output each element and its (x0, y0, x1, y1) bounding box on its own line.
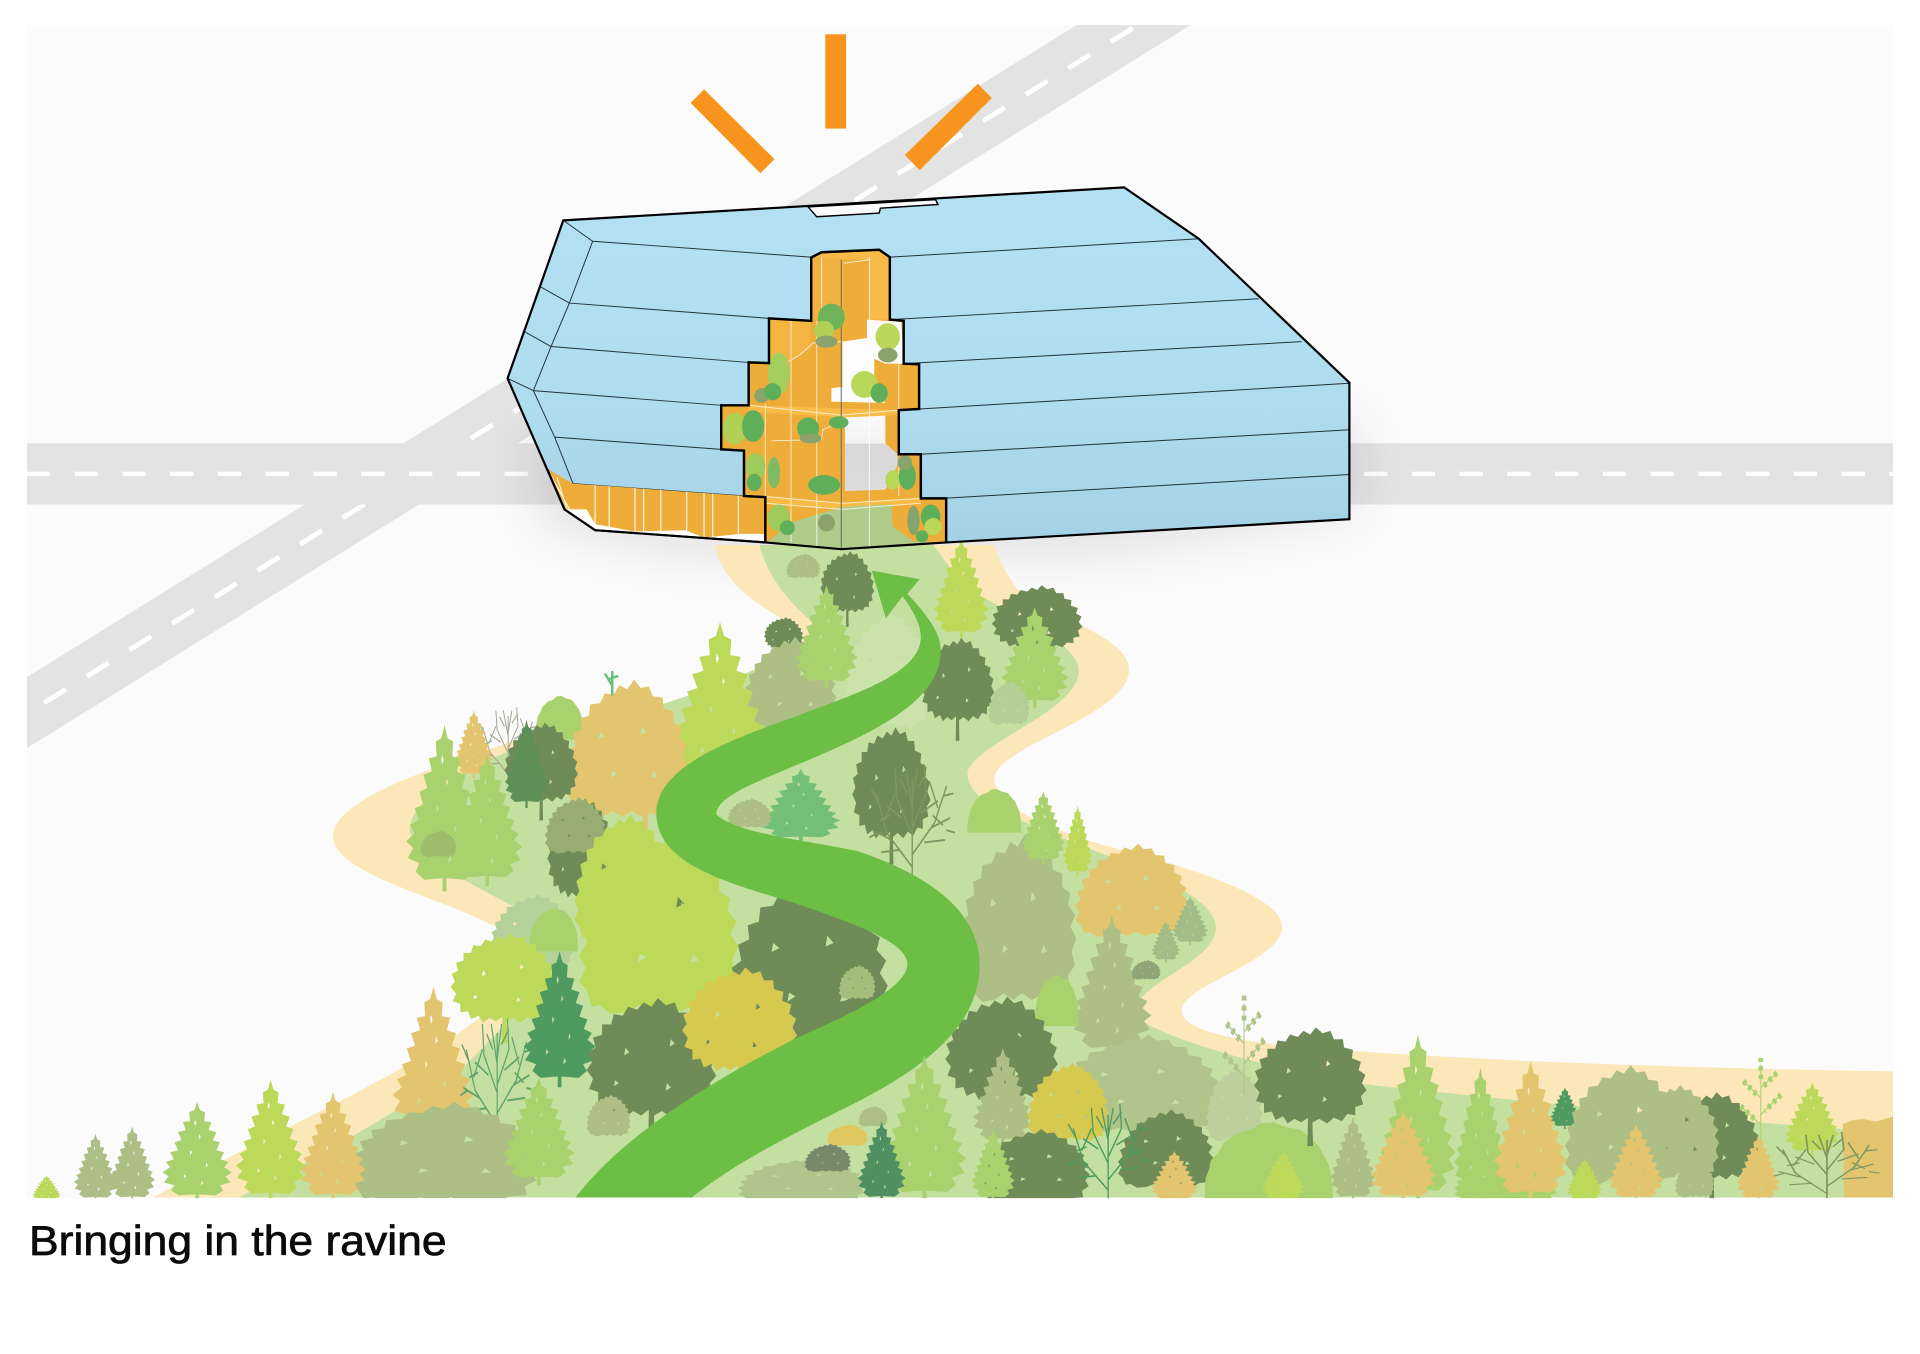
opening: thick black outline (721, 250, 946, 542)
forest: upper trees near building (535, 539, 1082, 857)
opening: small interior trees (722, 304, 942, 542)
building: floor lines (508, 220, 1349, 500)
building: glass facade (508, 187, 1349, 549)
building ground shadow (527, 416, 1359, 557)
forest: left cluster (406, 707, 738, 1043)
building: lower left orange cut (548, 470, 765, 542)
building: roof skylight (808, 200, 938, 217)
road: diagonal street (27, 24, 1191, 748)
title: Bringing in the ravine (29, 1217, 447, 1264)
road: horizontal street (27, 443, 1893, 504)
building: outer roof and wall outline (508, 187, 1349, 549)
forest: right-hand tree line (1254, 1027, 1893, 1202)
arrow: green path up the ravine (576, 571, 980, 1198)
sun rays: orange light bursts (691, 34, 992, 173)
forest: lower left trees (32, 951, 797, 1202)
building: glass tower with carved opening (508, 187, 1349, 551)
opening: white mullions (744, 257, 921, 549)
opening: carved atrium interior (716, 245, 955, 551)
ravine: green planted area (239, 545, 1893, 1198)
forest: foreground bottom centre trees (738, 1048, 1333, 1202)
forest: centre trees behind arrow (727, 727, 1264, 1141)
ravine: sand bank (153, 545, 1893, 1198)
